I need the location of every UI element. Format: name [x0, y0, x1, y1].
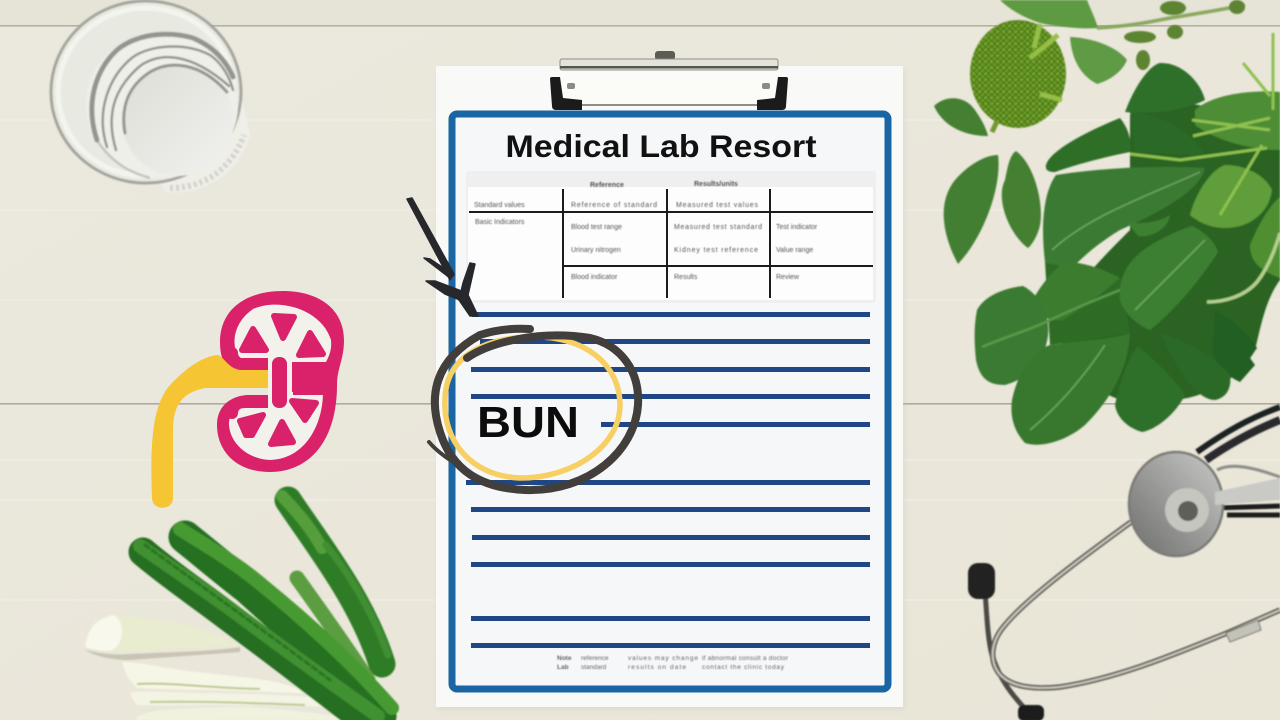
- table: lab results: Review: [776, 274, 800, 281]
- table: lab results: Results/units: [694, 181, 738, 188]
- black tubes: [1197, 407, 1280, 452]
- clipboard blue frame: [452, 114, 888, 689]
- table: lab results: [466, 171, 876, 303]
- heading: report title: Medical Lab Resort: [506, 128, 817, 164]
- icon: kidney with ureter: [151, 291, 344, 508]
- table: lab results: Kidney test reference: [674, 247, 758, 254]
- kidney outer shape: [217, 291, 344, 472]
- sprigs and top leaves: [1000, 0, 1245, 84]
- dark hand-drawn ring: [435, 329, 638, 490]
- table: lab results: Measured test standard: [674, 224, 762, 231]
- icon: glass of water: [51, 1, 250, 192]
- footer fine print: contact the clinic today: [702, 664, 785, 671]
- footer fine print: if abnormal consult a doctor: [702, 655, 789, 662]
- callout: BUN circled label: [429, 329, 638, 490]
- dark mass behind leaves: [1060, 104, 1280, 403]
- icon: leafy greens: [934, 0, 1280, 445]
- form lines: [466, 312, 870, 648]
- broccoli: [970, 20, 1066, 132]
- ear tube and knobs: [985, 590, 1028, 712]
- cucumber: upper right: [288, 500, 382, 664]
- icon: metal clipboard clip: [550, 51, 788, 110]
- table: lab results: Test indicator: [776, 224, 818, 231]
- yellow highlight ring: [445, 337, 620, 478]
- table: lab results: Results: [674, 274, 698, 281]
- table: lab results: Measured test values: [676, 202, 758, 209]
- footer fine print: Note: [557, 655, 572, 662]
- footer fine print: Lab: [557, 664, 569, 671]
- footer fine print: values may change: [628, 655, 698, 662]
- chest piece: [1129, 452, 1223, 556]
- metal tubing: [993, 522, 1280, 688]
- icon: stethoscope: [968, 407, 1280, 720]
- kidney inner white: [229, 305, 331, 460]
- icon: cucumbers: [140, 496, 392, 720]
- callout: BUN circled label: BUN: [477, 398, 579, 447]
- table: lab results: Basic Indicators: [475, 219, 525, 226]
- table: lab results: Urinary nitrogen: [571, 247, 621, 254]
- footer fine print: [557, 655, 789, 671]
- light leaves right: [1195, 91, 1280, 150]
- table: lab results: Value range: [776, 247, 813, 254]
- icon: spring onions: [85, 615, 347, 720]
- cucumber: thin middle: [297, 578, 368, 680]
- footer fine print: standard: [581, 664, 607, 671]
- ureter: [151, 355, 268, 508]
- small leaves left: [934, 98, 988, 136]
- panel: clipboard paper: [436, 66, 904, 709]
- table: lab results: Standard values: [474, 202, 525, 209]
- table: lab results: Reference: [590, 182, 624, 189]
- table: lab results: Blood test range: [571, 224, 622, 231]
- spinach leaves: [1046, 118, 1131, 172]
- table: lab results: Reference of standard: [571, 202, 657, 209]
- table: lab results: Blood indicator: [571, 274, 618, 281]
- footer fine print: results on date: [628, 664, 686, 671]
- footer fine print: reference: [581, 655, 609, 662]
- kidney hooks and lobes: [240, 316, 323, 444]
- cucumber: front: [143, 552, 372, 720]
- arrow: pointing to table: [407, 198, 478, 316]
- stems: [1207, 233, 1280, 302]
- cucumber: middle: [185, 537, 380, 716]
